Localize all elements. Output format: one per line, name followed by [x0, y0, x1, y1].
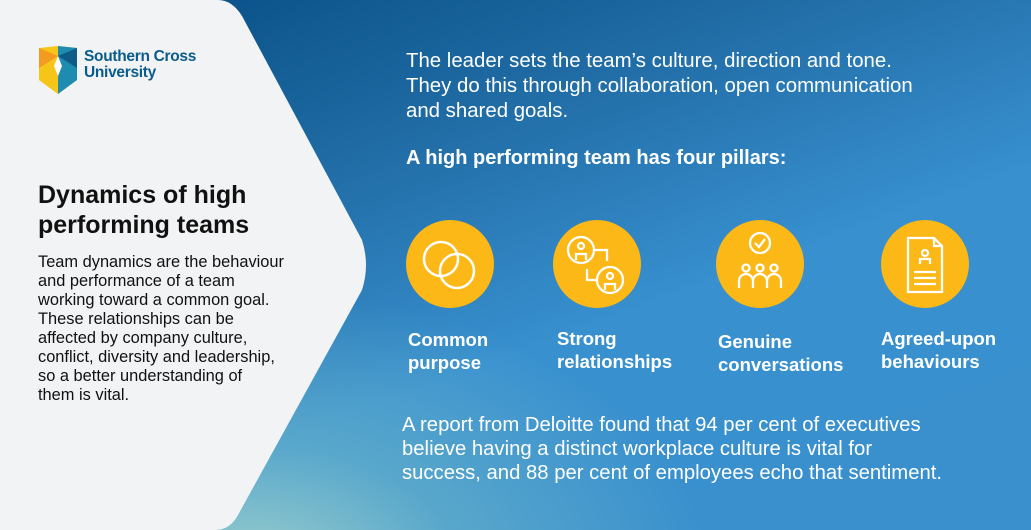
label: strong relationships: Strong	[557, 328, 617, 349]
text block: intro: them is vital.	[38, 386, 129, 404]
text block: leader: The leader sets the team’s culture, direction and tone.	[406, 50, 892, 72]
icon: genuine conversations	[716, 220, 804, 308]
text block: intro	[38, 253, 284, 404]
label: agreed-upon behaviours: Agreed-upon	[881, 328, 996, 349]
icon: strong relationships	[553, 220, 641, 308]
label: strong relationships: relationships	[557, 351, 672, 372]
label: agreed-upon behaviours	[881, 328, 996, 372]
icon: agreed-upon behaviours	[881, 220, 969, 308]
label: genuine conversations: conversations	[718, 354, 843, 375]
label: strong relationships	[557, 328, 672, 372]
text block: deloitte: success, and 88 per cent of employees echo that sentiment.	[402, 462, 942, 484]
heading: performing teams	[38, 211, 249, 239]
text block: intro: conflict, diversity and leadership,	[38, 348, 275, 366]
text block: deloitte: believe having a distinct workplace culture is vital for	[402, 438, 872, 460]
logo: University	[84, 64, 156, 81]
text block: leader: They do this through collaboration, open communication	[406, 75, 913, 97]
text block: intro: affected by company culture,	[38, 329, 247, 347]
heading	[38, 181, 249, 239]
label: genuine conversations	[718, 331, 843, 375]
text block: intro: and performance of a team	[38, 272, 235, 290]
text block: intro: so a better understanding of	[38, 367, 242, 385]
label: common purpose	[408, 329, 488, 373]
text block: intro: Team dynamics are the behaviour	[38, 253, 284, 271]
label: genuine conversations: Genuine	[718, 331, 792, 352]
text block: intro: These relationships can be	[38, 310, 234, 328]
text block: intro: working toward a common goal.	[38, 291, 269, 309]
text block: leader	[406, 50, 913, 122]
text block: leader: and shared goals.	[406, 100, 568, 122]
text block: deloitte: A report from Deloitte found that 94 per cent of executives	[402, 414, 921, 436]
heading: four pillars: A high performing team has four pillars:	[406, 147, 786, 169]
label: common purpose: Common	[408, 329, 488, 350]
icon: common purpose	[406, 220, 494, 308]
text block: deloitte	[402, 414, 942, 484]
logo	[39, 46, 196, 94]
label: common purpose: purpose	[408, 352, 481, 373]
logo: Southern Cross	[84, 48, 196, 65]
heading: Dynamics of high	[38, 181, 246, 209]
label: agreed-upon behaviours: behaviours	[881, 351, 980, 372]
